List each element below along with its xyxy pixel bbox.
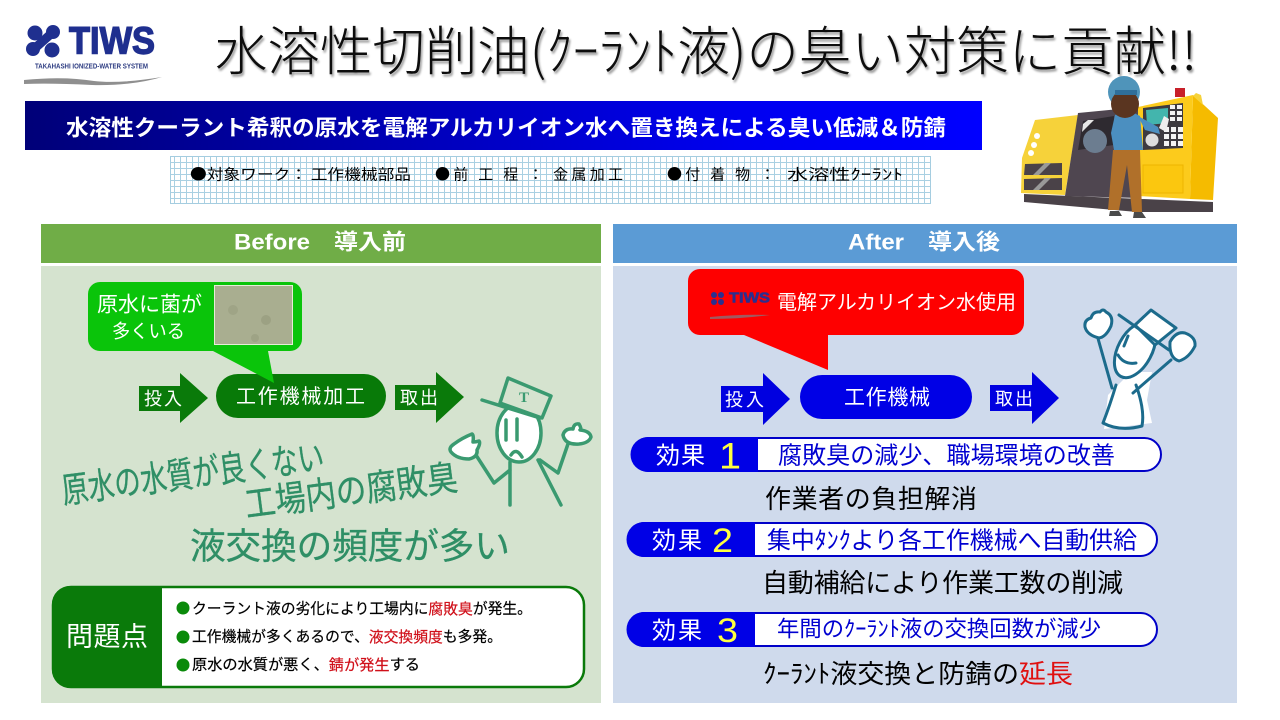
logo: TIWS: TAKAHASHI IONIZED-WATER SYSTEM [35,64,148,70]
effect 1 [630,436,1161,476]
panel: work conditions: ●前 工 程 ： 金属加工 [435,164,623,184]
figure: worried character [450,378,591,505]
arrow: output [990,372,1059,424]
text: frequent fluid change: 液交換の頻度が多い [190,526,510,566]
panel: problems: クーラント液の劣化により工場内に腐敗臭が発生。 [192,600,532,618]
panel: work conditions [170,156,930,204]
after header [613,224,1237,263]
figure: worried character: T [519,390,529,406]
logo: TIWS [24,20,162,85]
callout: bacteria in raw water: 多くいる [112,320,185,342]
panel: after [613,224,1237,703]
panel: problems: 工作機械が多くあるので、液交換頻度も多発。 [192,628,502,646]
after body background [613,266,1237,703]
process pill: machining [216,374,386,418]
process pill: machining: 工作機械加工 [236,385,365,408]
before header [41,224,601,263]
callout: alkaline ion water: TIWS [729,290,770,306]
arrow: input: 投入 [144,389,182,409]
before header: Before 導入前 [234,230,406,254]
panel: problems: 原水の水質が悪く、錆が発生する [192,656,420,674]
text: poor water quality: 原水の水質が良くない [59,436,326,511]
effect 1 result: 作業者の負担解消 [765,484,977,514]
callout: bacteria in raw water [88,282,302,383]
effect 2: 集中ﾀﾝｸより各工作機械へ自動供給 [767,528,1137,554]
arrow: output [395,372,464,423]
panel: before [41,224,601,703]
effect 1: 腐敗臭の減少、職場環境の改善 [778,442,1115,470]
effect 3: 年間のｸｰﾗﾝﾄ液の交換回数が減少 [777,616,1101,642]
effect 3: 効果 [652,618,702,644]
after header: After 導入後 [848,230,1000,254]
panel: problems: 問題点 [66,622,148,652]
text: factory odor: 工場内の腐敗臭 [242,457,460,525]
arrow: input [721,373,790,425]
arrow: input: 投入 [725,390,764,410]
process pill: machine tool [800,375,972,419]
callout: alkaline ion water [688,269,1024,370]
logo: TIWS: TIWS [69,20,155,62]
panel: work conditions: 水溶性ｸｰﾗﾝﾄ [787,164,903,184]
callout: alkaline ion water: 電解アルカリイオン水使用 [777,291,1016,314]
before body background [41,266,601,703]
process pill: machine tool: 工作機械 [844,386,930,410]
effect 2: 2 [712,522,733,560]
effect 1: 効果 [656,442,705,470]
effect 3 result: ｸｰﾗﾝﾄ液交換と防錆の 延長 [763,659,1073,689]
arrow: output: 取出 [995,389,1033,409]
banner: subtitle [25,101,982,150]
panel: work conditions: ●付 着 物 ： [667,164,775,184]
arrow: input [139,373,208,423]
effect 3: 3 [717,612,738,650]
effect 2 result: 自動補給により作業工数の削減 [762,568,1123,598]
illustration: machine and worker [1021,76,1218,218]
panel: work conditions: ●対象ワーク： 工作機械部品 [190,164,411,184]
panel: problems [52,586,584,688]
arrow: output: 取出 [400,388,438,408]
figure: happy character [1085,310,1195,429]
effect 3 [626,612,1157,650]
title: 水溶性切削油(ｸｰﾗﾝﾄ液)の臭い対策に貢献!! [215,10,1197,86]
effect 1: 1 [719,436,741,476]
callout: bacteria in raw water: 原水に菌が [97,294,202,316]
effect 2 [626,522,1157,560]
banner: subtitle: 水溶性クーラント希釈の原水を電解アルカリイオン水へ置き換えによる臭い低減＆防錆 [66,116,946,140]
effect 2: 効果 [652,528,702,554]
